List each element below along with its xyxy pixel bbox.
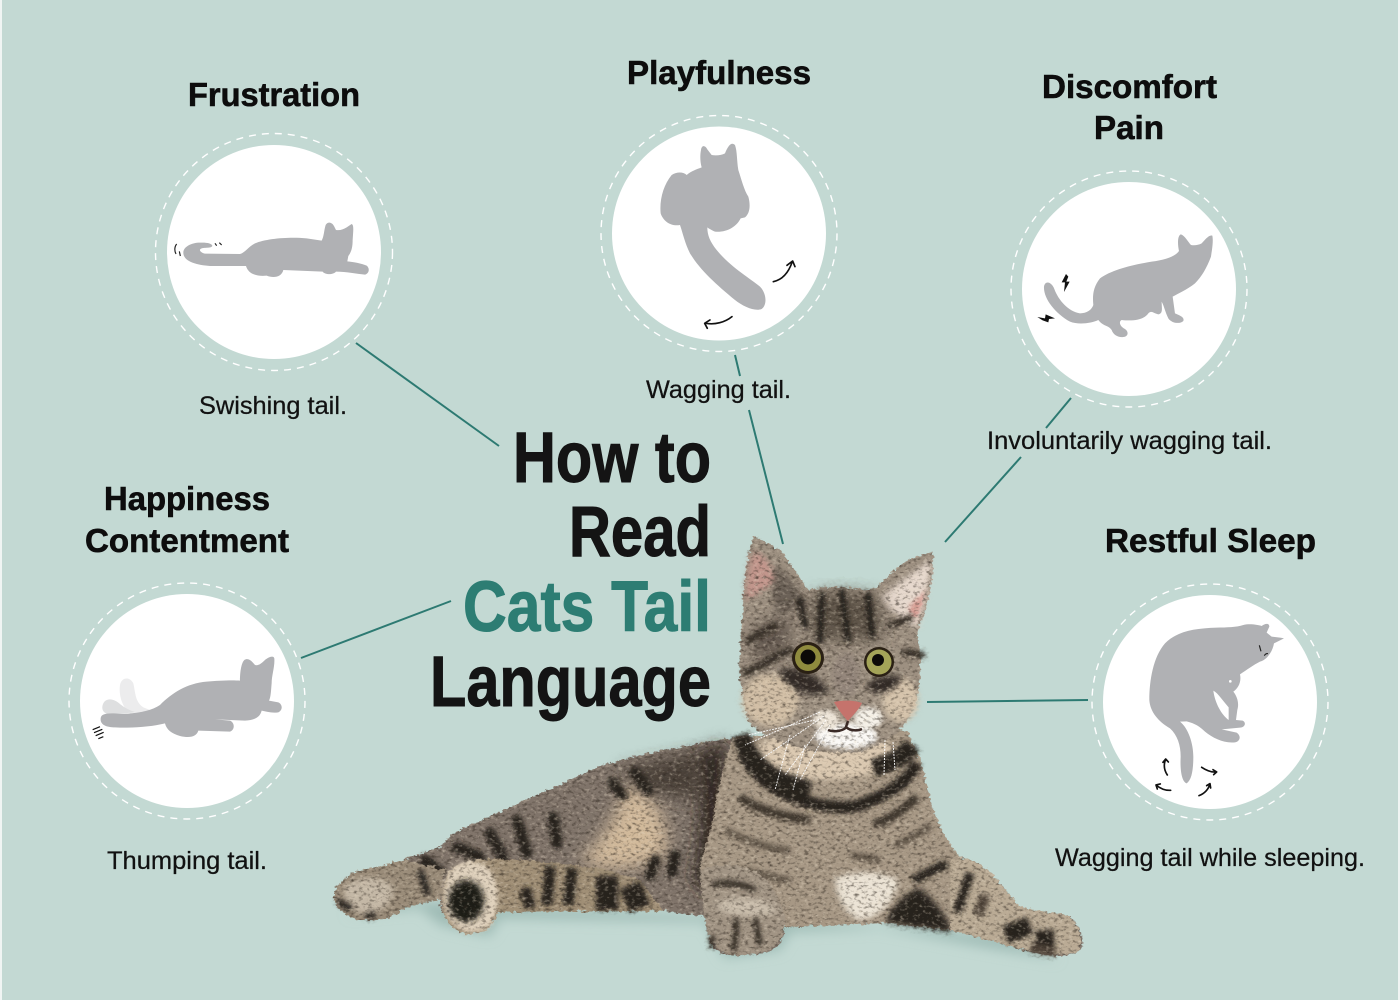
foreground hind leg [442,859,663,934]
circle: discomfort [1011,171,1247,407]
title: Read [569,493,711,572]
muzzle [815,723,877,749]
heading: restful sleep: Restful Sleep [1105,522,1316,559]
dark flank shading [692,742,725,900]
title: Language [430,643,711,722]
nose bridge [833,653,859,697]
chest [700,730,962,933]
heading: happiness contentment [85,480,289,559]
circle: restful sleep [1092,584,1328,820]
ears [746,552,776,600]
caption: wagging tail: Wagging tail. [646,376,791,404]
icon: cat with twitching tail [1037,234,1213,337]
heading: happiness contentment: Happiness [104,480,270,517]
right leg and paw [950,858,1081,954]
cat ground shadow [345,900,1060,960]
cat fur group [334,537,1083,956]
caption: involuntarily wagging tail: Involuntarily wagging tail. [987,427,1272,455]
panel: happiness and contentment [69,480,305,875]
caption: swishing tail: Swishing tail. [199,392,347,420]
head [740,537,933,753]
panel: frustration [156,76,392,420]
heading: discomfort pain [1042,68,1217,146]
circle: frustration [156,134,392,370]
heading: discomfort pain: Discomfort [1042,68,1217,105]
chin bib [755,730,895,780]
caption: wagging tail while sleeping: Wagging tail while sleeping. [1055,844,1365,872]
caption: thumping tail: Thumping tail. [107,847,267,875]
icon: sleeping cat with tail [1149,624,1284,796]
heading: playfulness: Playfulness [627,54,811,91]
nose and mouth [828,701,862,731]
title: Cats Tail [463,568,711,647]
circle: playfulness [601,116,837,352]
whiskers [745,712,895,790]
heading: happiness contentment: Contentment [85,522,289,559]
title [430,419,711,722]
dark under right leg [885,888,952,932]
icon: cat thumping tail [93,657,282,739]
connector lines [301,343,1088,702]
white chest patch [835,872,898,920]
chest bands [725,735,930,880]
icon: cat swishing tail [175,223,369,277]
icon: cat wagging tail [660,144,795,328]
flank stripes [425,772,675,875]
facial stripes [745,592,922,672]
back paw and leg [334,860,445,920]
heading: discomfort pain: Pain [1094,109,1164,146]
cheeks [742,674,798,726]
eyes [792,642,894,677]
panel: discomfort and pain [987,68,1272,455]
cat body [334,730,1083,956]
circle: happiness [69,583,305,819]
illustration: tabby cat lying down [334,537,1083,960]
title: How to [513,419,711,498]
heading: frustration: Frustration [188,76,360,113]
panel: playfulness [601,54,837,404]
forehead shading [810,592,880,640]
haunch highlight [580,785,667,869]
front leg and paw [700,865,785,955]
panel: restful sleep [1055,522,1365,872]
